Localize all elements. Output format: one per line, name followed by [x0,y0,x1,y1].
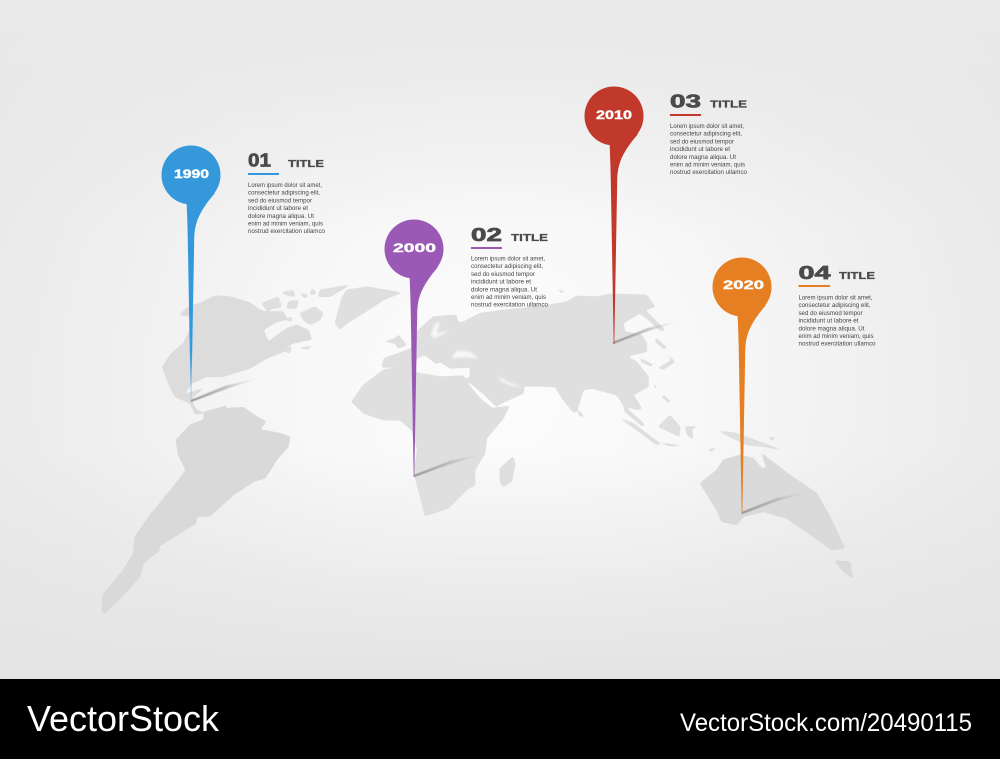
body text: sed do eiusmod tempor [798,310,863,317]
body text: dolore magna aliqua. Ut [248,213,314,220]
footer logo text: VectorStock [27,698,220,739]
text block: 03 [670,92,747,176]
body text: enim ad minim veniam, quis [670,162,746,168]
body text: sed do eiusmod tempor [670,138,735,145]
year label: 2000 [393,243,436,255]
heading title: TITLE [288,158,324,170]
text block: 02 [471,225,548,309]
year label: 2010 [596,110,632,122]
heading title: TITLE [511,232,548,244]
body text: nostrud exercitation ullamco [471,302,548,309]
body text: dolore magna aliqua. Ut [471,286,537,293]
pin: 2010 [584,86,644,344]
world map [102,285,853,613]
body text: incididunt ut labore et [798,318,859,325]
body text: enim ad minim veniam, quis [798,333,874,340]
map: South America [102,404,290,613]
heading number: 02 [471,225,502,245]
body text: nostrud exercitation ullamco [670,169,747,176]
body text: enim ad minim veniam, quis [471,294,547,301]
body text: dolore magna aliqua. Ut [670,154,736,161]
body text: consectetur adipiscing elit, [670,131,742,138]
heading title: TITLE [839,270,875,282]
body text [670,123,747,176]
pin: 1990 [162,146,220,401]
text block: 01 [248,150,325,235]
map: Africa and Oceania [352,367,853,578]
body text: consectetur adipiscing elit, [471,263,543,270]
footer url text: VectorStock.com/20490115 [680,709,972,737]
heading number: 03 [670,92,701,112]
body text: enim ad minim veniam, quis [248,220,324,228]
body text: Lorem ipsum dolor sit amet, [471,256,545,262]
body text [798,294,876,348]
heading number: 01 [248,150,271,170]
map: Eurasia [382,289,698,446]
footer band [0,679,1000,759]
map: inland seas [431,321,523,387]
year label: 1990 [174,169,209,181]
body text: nostrud exercitation ullamco [248,228,325,235]
body text: sed do eiusmod tempor [248,197,313,204]
pin shadows [191,320,812,514]
map: North America [162,285,402,414]
body text: nostrud exercitation ullamco [798,341,876,348]
body text [471,256,548,309]
pin: 2020 [712,258,772,514]
heading number: 04 [798,263,830,283]
year label: 2020 [723,280,764,292]
body text: consectetur adipiscing elit, [248,190,320,197]
body text: Lorem ipsum dolor sit amet, [798,294,873,302]
body text: dolore magna aliqua. Ut [798,325,865,332]
heading title: TITLE [710,99,747,111]
body text: incididunt ut labore et [670,146,730,153]
body text: incididunt ut labore et [471,279,531,286]
body text: Lorem ipsum dolor sit amet, [670,123,744,130]
body text: consectetur adipiscing elit, [798,302,871,309]
text block: 04 [798,263,876,348]
body text [248,182,325,235]
body text: incididunt ut labore et [248,205,308,212]
pin: 2000 [384,220,444,477]
body text: Lorem ipsum dolor sit amet, [248,182,322,189]
body text: sed do eiusmod tempor [471,271,536,278]
